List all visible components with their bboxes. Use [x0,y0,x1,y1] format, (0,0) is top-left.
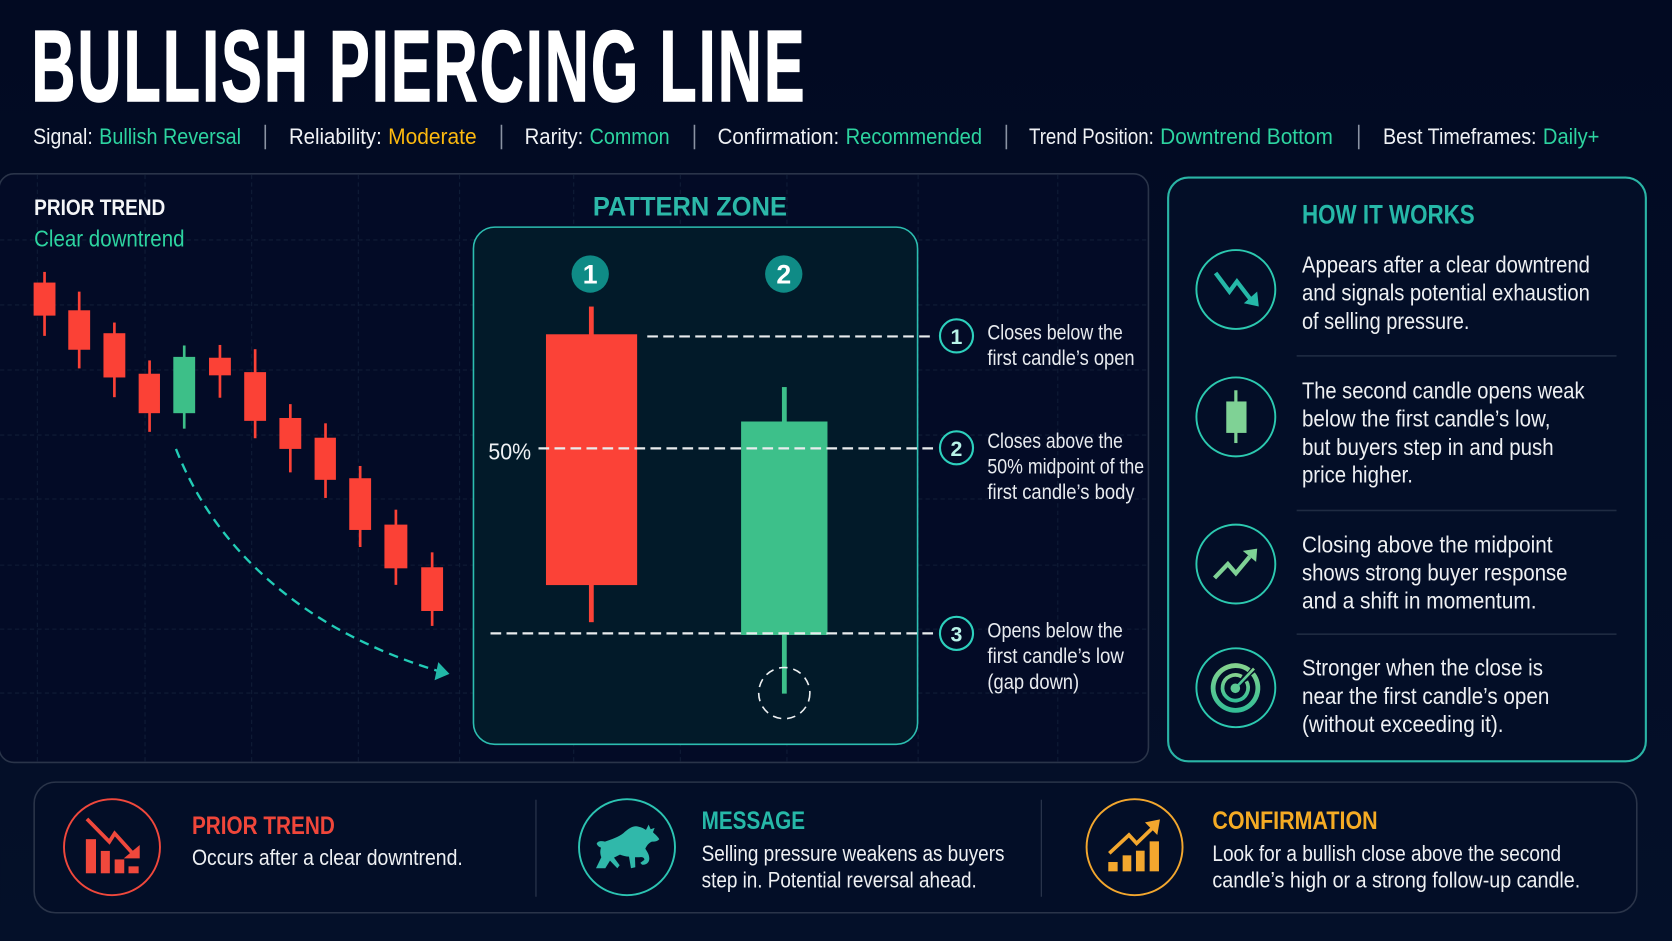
text: step 4 [1302,654,1549,737]
badge 2 [765,255,802,293]
prior trend heading: PRIOR TREND [34,195,165,220]
text: message: Selling pressure weakens as buyers [702,841,1005,866]
icon: candle [1196,377,1275,456]
icon: target [1196,648,1275,727]
callout 1 [940,319,1135,370]
red candle [546,307,637,622]
callout 2 [940,430,1144,504]
text: prior trend: PRIOR TREND [192,813,335,840]
panel: bottom summary [34,782,1637,913]
text: step 3: and a shift in momentum. [1302,587,1537,613]
icon: uptrend arrow [1196,525,1275,604]
callout 3: (gap down) [987,671,1079,694]
text: message: MESSAGE [702,808,805,835]
panel: how it works [1168,178,1646,761]
badge 1 [572,255,609,293]
stats row: Confirmation: [718,124,839,149]
text: confirmation: candle’s high or a strong follow-up candle. [1212,868,1580,893]
text: confirmation: Look for a bullish close above the second [1212,841,1561,866]
text: message [702,808,1005,893]
callout 2: 50% midpoint of the [987,455,1144,478]
stats row: Trend Position: [1029,124,1154,149]
text: step 2: but buyers step in and push [1302,434,1554,460]
text: step 2: The second candle opens weak [1302,377,1585,403]
text: prior trend [192,813,463,870]
stats row: Signal: [33,124,93,149]
stats row: Common [590,124,670,149]
badge 1: 1 [583,260,598,290]
green candle [741,387,827,694]
text: confirmation: CONFIRMATION [1212,808,1378,835]
icon: amber rising bars [1087,799,1183,895]
text: prior trend: Occurs after a clear downtrend. [192,845,463,870]
text: step 4: (without exceeding it). [1302,711,1503,737]
text: step 2: below the first candle’s low, [1302,406,1550,432]
prior trend subtitle: Clear downtrend [34,225,184,251]
callout 3: 3 [951,622,963,646]
icon: bull [579,799,675,895]
text: step 4: Stronger when the close is [1302,654,1543,680]
stats row: Bullish Reversal [99,124,241,149]
stats row: Rarity: [525,124,583,149]
stats row: Reliability: [289,124,382,149]
stats row: Downtrend Bottom [1160,124,1333,149]
dashed trend arrow [176,449,449,680]
title: BULLISH PIERCING LINE [31,10,807,123]
panel: pattern zone [473,227,918,744]
text: step 3: Closing above the midpoint [1302,531,1553,557]
stats row: Moderate [388,124,477,149]
pattern zone heading: PATTERN ZONE [593,190,787,221]
stats row: Best Timeframes: [1383,124,1537,149]
callout 3: Opens below the [987,620,1123,643]
callout 1: Closes below the [987,322,1123,345]
badge 2: 2 [776,260,791,290]
panel: chart [0,174,1148,762]
callout 3 [940,617,1125,694]
callout 3: first candle’s low [987,645,1125,668]
icon: downtrend arrow [1196,250,1275,329]
text: step 1: and signals potential exhaustion [1302,280,1590,306]
downtrend candlesticks [34,272,443,626]
gap marker dashed circle [759,667,810,719]
text: step 1: of selling pressure. [1302,308,1469,334]
callout 2: 2 [951,437,962,461]
text: step 2: price higher. [1302,461,1413,487]
callout 2: Closes above the [987,430,1123,453]
text: step 3 [1302,531,1567,613]
text: step 1: Appears after a clear downtrend [1302,251,1590,277]
icon: red falling bars [64,799,160,895]
text: message: step in. Potential reversal ahead. [702,868,977,893]
callout 1: first candle’s open [987,347,1135,370]
text: step 4: near the first candle’s open [1302,683,1549,709]
text: confirmation [1212,808,1580,893]
callout 2: first candle’s body [987,481,1135,504]
text: step 2 [1302,377,1585,487]
stats row: Daily+ [1543,124,1599,149]
stats row: Recommended [846,124,982,149]
stats row [33,124,1599,149]
dashed guide lines [491,336,935,633]
how it works heading: HOW IT WORKS [1302,199,1475,229]
callout 1: 1 [951,325,963,349]
text: step 1 [1302,251,1590,334]
50% label: 50% [488,439,531,465]
text: step 3: shows strong buyer response [1302,560,1567,586]
